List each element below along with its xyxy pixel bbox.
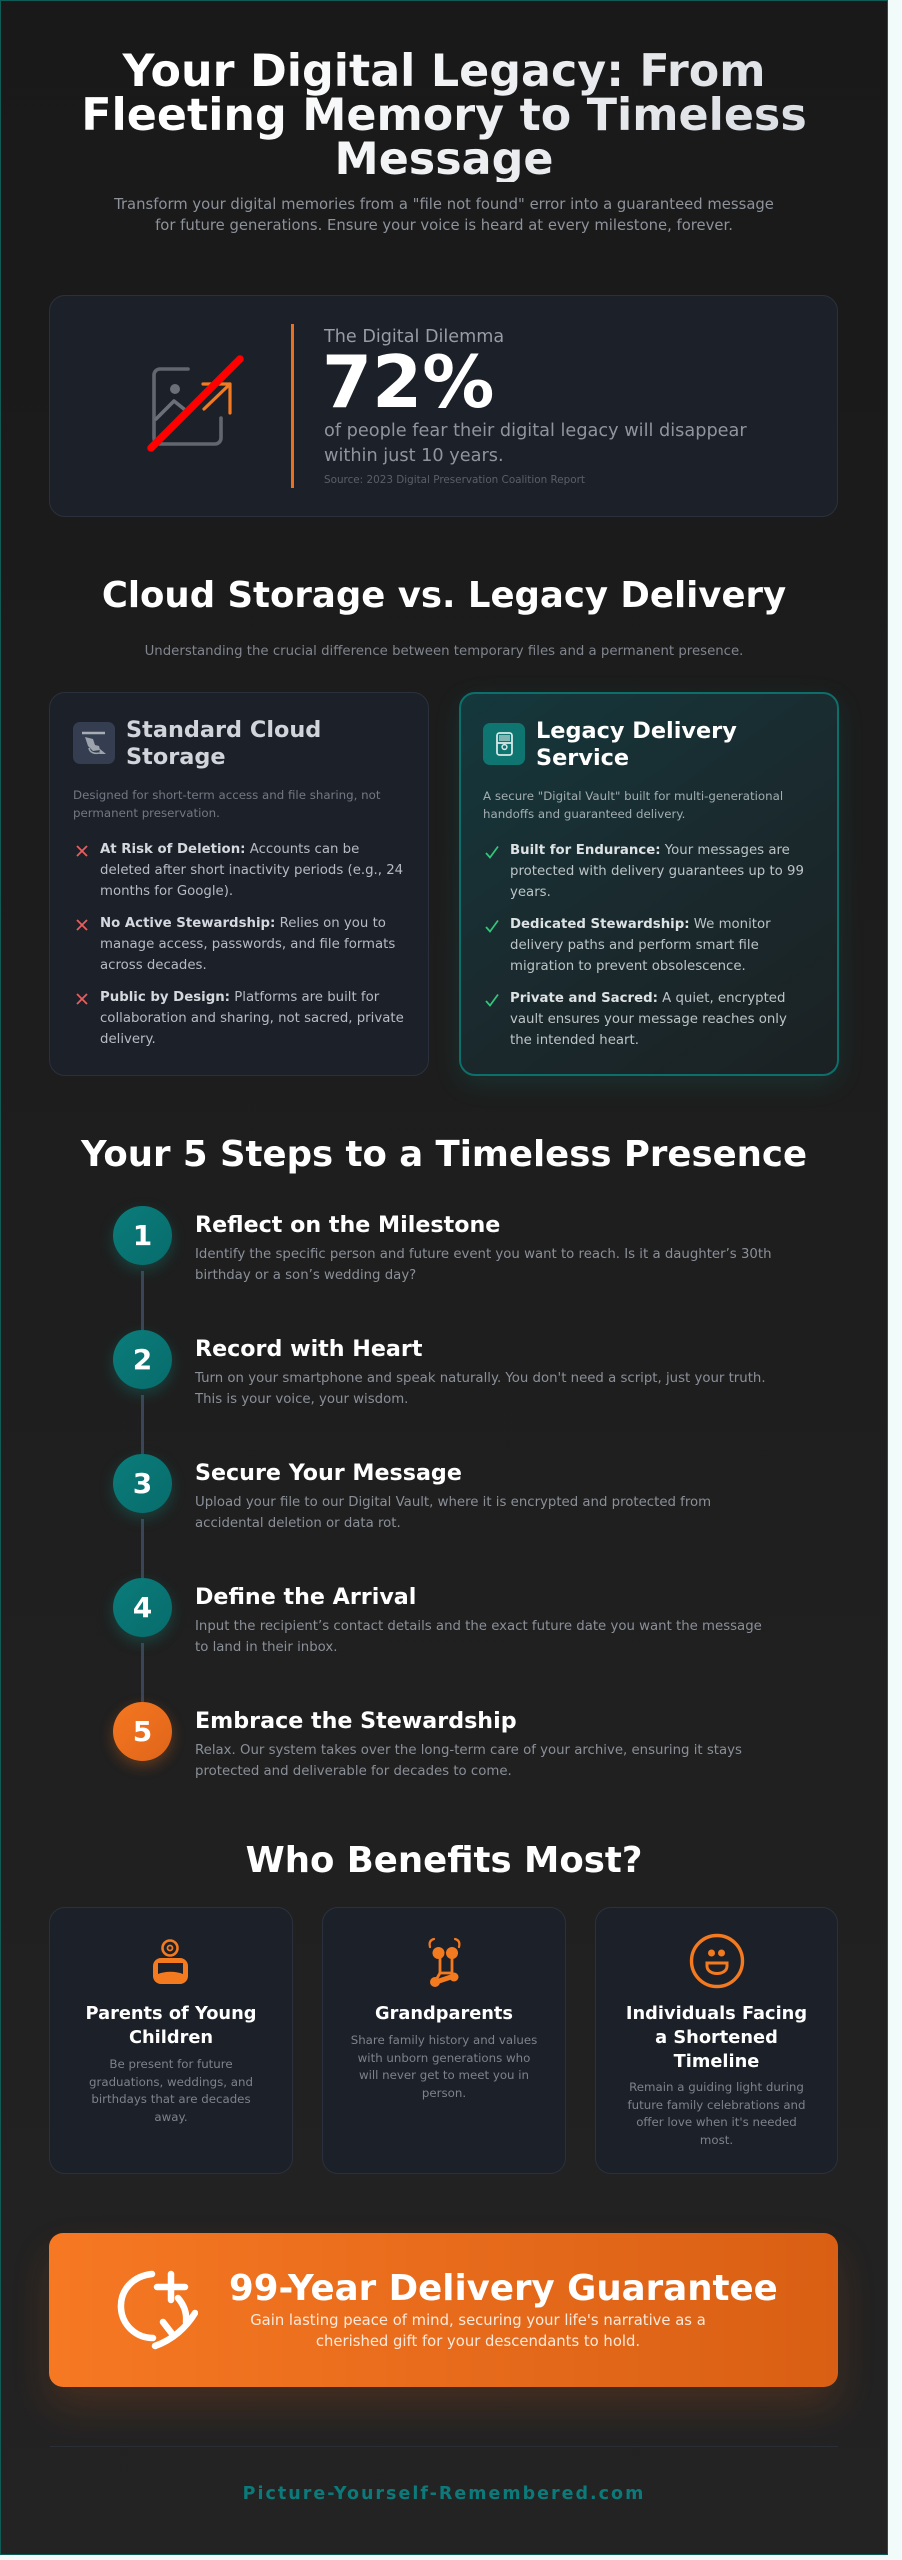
list item: endurance: protected with delivery guarantees up to 99: [510, 864, 804, 879]
benefit title: [626, 2003, 807, 2072]
benefit description: person.: [422, 2086, 466, 2100]
list item: deletion risk: At Risk of Deletion: Accounts can be: [100, 842, 359, 857]
comparison subtitle: Understanding the crucial difference between temporary files and a permanent presence.: [145, 644, 743, 659]
list item: endurance: years.: [510, 885, 551, 900]
list item: private: vault ensures your message reaches only: [510, 1012, 787, 1027]
benefit description: graduations, weddings, and: [89, 2075, 253, 2089]
icon: digital vault: [483, 723, 525, 765]
heading: comparison: Cloud Storage vs. Legacy Delivery: [102, 575, 786, 616]
banner description: cherished gift for your descendants to hold.: [316, 2332, 640, 2350]
panel: parents: [49, 1907, 293, 2174]
benefit title: [86, 2003, 256, 2048]
list item: private: Private and Sacred: A quiet, encrypted: [510, 991, 785, 1006]
card title: Standard Cloud: [126, 717, 321, 743]
footer divider: [50, 2446, 838, 2447]
benefit title: Individuals Facing: [626, 2003, 807, 2024]
connector 2: [141, 1395, 144, 1454]
benefit title: Timeline: [674, 2051, 759, 2072]
benefit description: will never get to meet you in: [359, 2068, 529, 2082]
step title: Embrace the Stewardship: [195, 1708, 517, 1734]
list item: endurance: [485, 843, 804, 900]
step description: Upload your file to our Digital Vault, where it is encrypted and protected from: [195, 1495, 711, 1510]
card description: A secure "Digital Vault" built for multi-generational: [483, 789, 783, 803]
title: [0, 50, 888, 182]
step description: This is your voice, your wisdom.: [195, 1392, 408, 1407]
list item: public by design: [76, 990, 404, 1047]
benefit description: most.: [700, 2133, 733, 2147]
banner description: [228, 2311, 728, 2352]
list item: stewardship: migration to prevent obsolescence.: [510, 959, 746, 974]
step description: Relax. Our system takes over the long-term care of your archive, ensuring it stays: [195, 1743, 742, 1758]
step description: [195, 1743, 742, 1779]
subtitle: Transform your digital memories from a "file not found" error into a guaranteed message: [114, 196, 774, 213]
icon: crossed-out image with arrow: [147, 355, 244, 452]
step 4: [110, 1578, 762, 1655]
benefit title: Parents of Young: [86, 2003, 256, 2024]
stat number: 72%: [322, 340, 494, 424]
list item: no stewardship: manage access, passwords, and file formats: [100, 937, 395, 952]
benefit description: offer love when it's needed: [636, 2115, 797, 2129]
list item: stewardship: Dedicated Stewardship: We monitor: [510, 917, 771, 932]
benefit description: [89, 2057, 253, 2124]
list item: stewardship: delivery paths and perform smart file: [510, 938, 759, 953]
step title: Secure Your Message: [195, 1460, 462, 1486]
panel: standard cloud storage: [49, 692, 429, 1076]
step description: Input the recipient’s contact details and the exact future date you want the message: [195, 1619, 762, 1634]
step description: [195, 1619, 762, 1655]
benefit description: [627, 2080, 806, 2147]
icon: check mark: [485, 920, 499, 933]
source: Source: 2023 Digital Preservation Coalition Report: [324, 474, 585, 486]
step description: birthday or a son’s wedding day?: [195, 1268, 416, 1283]
step description: [195, 1247, 772, 1283]
number badge: 3: [133, 1467, 152, 1500]
step description: [194, 1371, 766, 1407]
card title: Service: [536, 745, 629, 771]
number badge: [113, 1454, 172, 1513]
benefit title: Grandparents: [375, 2003, 513, 2024]
number badge: [113, 1702, 172, 1761]
connector 3: [141, 1519, 144, 1578]
step 3: [110, 1454, 711, 1531]
list item: public by design: collaboration and sharing, not sacred, private: [100, 1011, 404, 1026]
list item: public by design: Public by Design: Platforms are built for: [100, 990, 379, 1005]
number badge: 2: [133, 1343, 152, 1376]
stat description: within just 10 years.: [324, 446, 504, 466]
subtitle: [114, 196, 774, 234]
icon: x mark: [76, 845, 88, 857]
benefit description: away.: [154, 2110, 188, 2124]
panel: grandparents: [322, 1907, 566, 2174]
step description: protected and deliverable for decades to come.: [195, 1764, 512, 1779]
stat label: The Digital Dilemma: [324, 327, 504, 347]
list item: private: the intended heart.: [510, 1033, 639, 1048]
icon: x mark: [76, 919, 88, 931]
footer link: Picture-Yourself-Remembered.com: [243, 2484, 645, 2504]
step title: Record with Heart: [195, 1336, 422, 1362]
step title: Define the Arrival: [195, 1584, 416, 1610]
card description: Designed for short-term access and file sharing, not: [73, 788, 380, 802]
step 5: [106, 1700, 742, 1779]
step title: Reflect on the Milestone: [195, 1212, 500, 1238]
icon: smiling face: [690, 1934, 744, 1988]
card title: [126, 717, 321, 770]
step 2: [110, 1330, 766, 1407]
number badge: 4: [133, 1591, 152, 1624]
list item: public by design: delivery.: [100, 1032, 156, 1047]
list item: private: [485, 991, 787, 1048]
icon: check mark: [485, 846, 499, 859]
banner description: Gain lasting peace of mind, securing your life's narrative as a: [250, 2312, 706, 2329]
title: Your Digital Legacy: From: [122, 46, 766, 97]
benefit title: Children: [129, 2027, 213, 2048]
card description: [73, 788, 380, 820]
benefit description: [351, 2033, 537, 2100]
panel: legacy delivery service: [459, 692, 839, 1076]
subtitle: for future generations. Ensure your voice is heard at every milestone, forever.: [155, 217, 733, 234]
card description: permanent preservation.: [73, 806, 220, 820]
benefit description: future family celebrations and: [627, 2098, 806, 2112]
step description: to land in their inbox.: [195, 1640, 337, 1655]
benefit title: a Shortened: [655, 2027, 778, 2048]
step description: Turn on your smartphone and speak naturally. You don't need a script, just your truth.: [195, 1371, 766, 1386]
panel: guarantee banner: [49, 2233, 838, 2387]
connector 4: [141, 1643, 144, 1702]
icon: clock with plus and check: [118, 2270, 198, 2350]
benefit description: with unborn generations who: [358, 2051, 530, 2065]
list item: deletion risk: months for Google).: [100, 884, 233, 899]
banner title: 99-Year Delivery Guarantee: [229, 2268, 778, 2309]
heading: steps: Your 5 Steps to a Timeless Presence: [81, 1134, 807, 1175]
list item: deletion risk: [76, 842, 403, 899]
benefit description: Remain a guiding light during: [629, 2080, 804, 2094]
list item: no stewardship: across decades.: [100, 958, 207, 973]
connector 1: [141, 1271, 144, 1330]
stat description: [324, 421, 747, 466]
number badge: 1: [133, 1219, 152, 1252]
number badge: [113, 1330, 172, 1389]
heading: who benefits: Who Benefits Most?: [246, 1840, 642, 1881]
benefit description: Share family history and values: [351, 2033, 537, 2047]
icon: check mark: [485, 994, 499, 1007]
step 1: [110, 1206, 772, 1283]
benefit description: Be present for future: [109, 2057, 233, 2071]
icon: parent and child: [153, 1939, 188, 1984]
step description: accidental deletion or data rot.: [195, 1516, 401, 1531]
card title: [536, 718, 737, 771]
list item: no stewardship: [76, 916, 395, 973]
step description: Identify the specific person and future event you want to reach. Is it a daughter’s 30th: [195, 1247, 772, 1262]
title: Message: [335, 134, 553, 185]
step description: [195, 1495, 711, 1531]
list item: endurance: Built for Endurance: Your messages are: [510, 843, 790, 858]
icon: x mark: [76, 993, 88, 1005]
icon: grandparents: [428, 1938, 460, 1987]
list item: stewardship: [485, 917, 771, 974]
list item: no stewardship: No Active Stewardship: Relies on you to: [100, 916, 386, 931]
card title: Storage: [126, 744, 226, 770]
number badge: [113, 1578, 172, 1637]
benefit description: birthdays that are decades: [91, 2092, 251, 2106]
icon: cloud off: [73, 722, 115, 764]
card title: Legacy Delivery: [536, 718, 737, 744]
card description: handoffs and guaranteed delivery.: [483, 807, 685, 821]
card description: [483, 789, 783, 821]
number badge: 5: [133, 1715, 152, 1748]
stat description: of people fear their digital legacy will disappear: [324, 421, 747, 441]
title: Fleeting Memory to Timeless: [81, 90, 807, 141]
number badge: [113, 1206, 172, 1265]
panel: shortened timeline: [595, 1907, 838, 2174]
panel: digital dilemma stat: [49, 295, 838, 517]
list item: deletion risk: deleted after short inactivity periods (e.g., 24: [100, 863, 403, 878]
divider accent: [291, 324, 294, 488]
